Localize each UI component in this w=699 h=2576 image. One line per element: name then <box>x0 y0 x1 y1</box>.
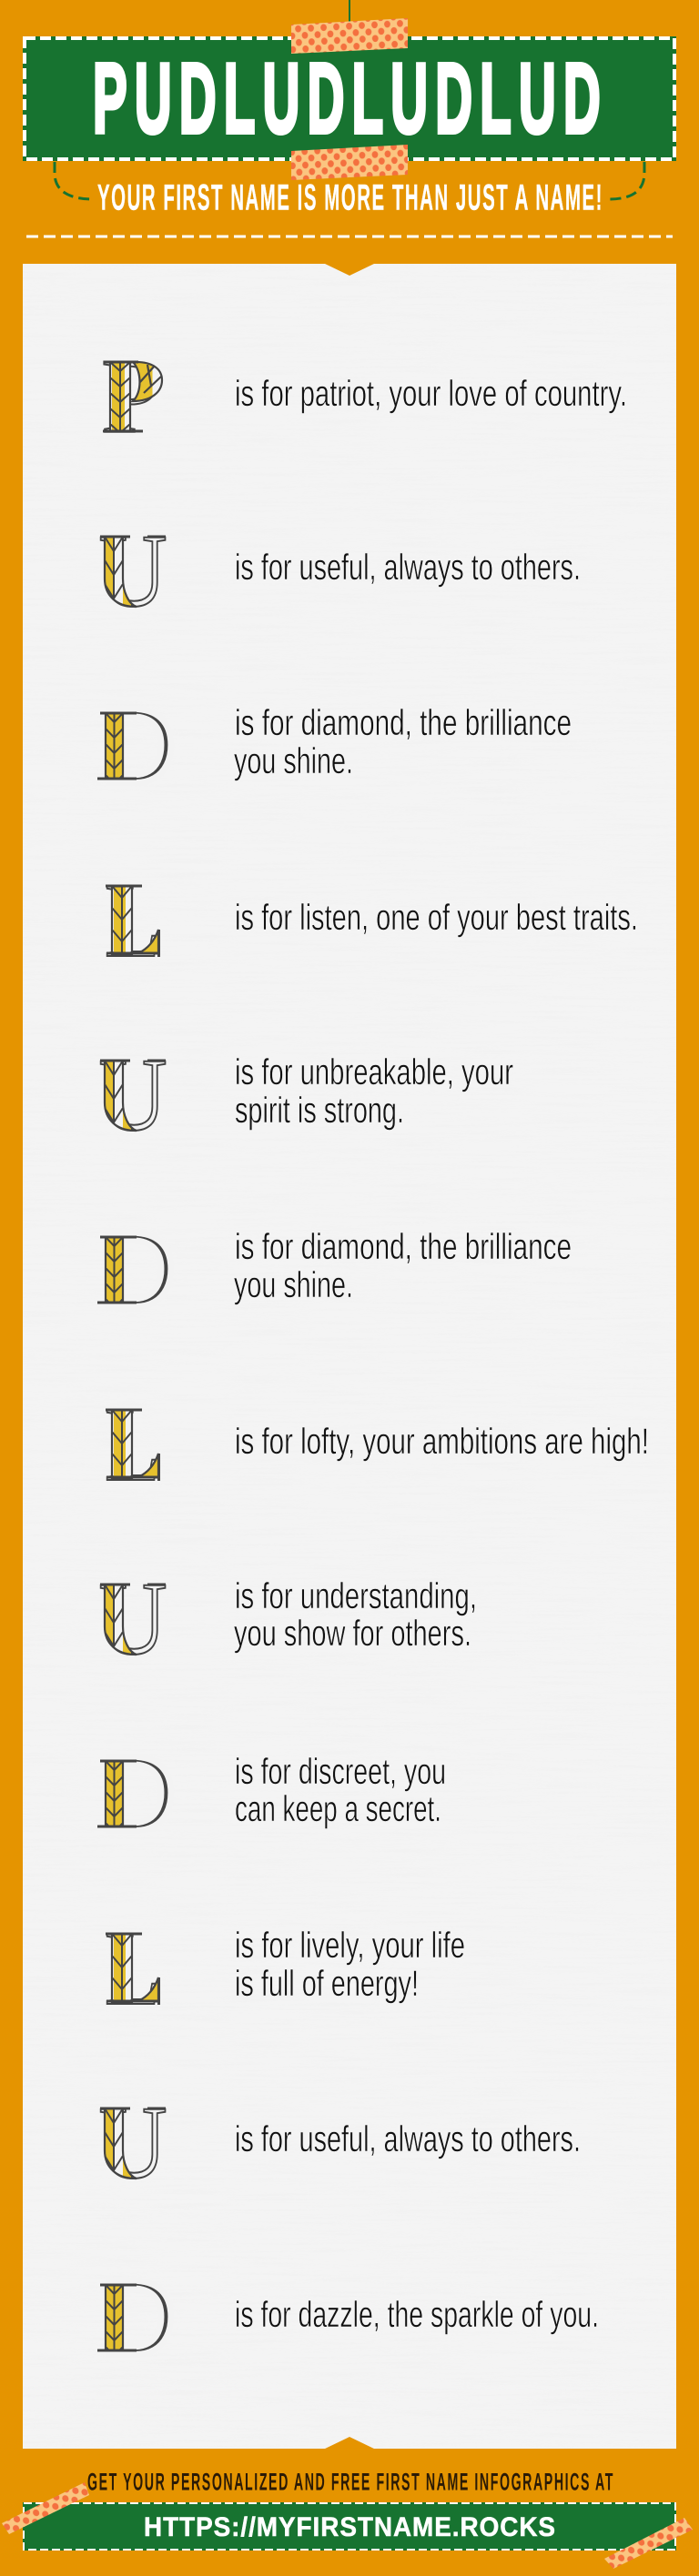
letter L: L <box>105 1908 160 2028</box>
description: you show for others. <box>234 1614 471 1654</box>
row 11: U <box>98 2084 581 2200</box>
letter D: D <box>101 1210 176 1330</box>
description <box>235 1052 513 1131</box>
description <box>234 703 572 781</box>
footer url banner <box>23 2502 676 2551</box>
row 5: U <box>98 1036 513 1152</box>
letter D: D <box>101 686 176 806</box>
description: you shine. <box>234 1265 353 1305</box>
description: is for unbreakable, your <box>235 1052 513 1092</box>
description <box>234 1227 572 1305</box>
letter L: L <box>105 1384 160 1504</box>
description <box>235 1926 465 2004</box>
letter U: U <box>98 512 167 629</box>
letter D: D <box>101 1734 176 1854</box>
description: you shine. <box>234 741 353 781</box>
letter U: U <box>98 1560 167 1676</box>
letter U: U <box>98 1036 167 1152</box>
tape top <box>291 18 408 54</box>
dashed separator <box>26 235 673 238</box>
description: is for discreet, you <box>235 1752 446 1792</box>
description: is full of energy! <box>235 1964 419 2004</box>
description <box>234 1576 477 1654</box>
url: HTTPS://MYFIRSTNAME.ROCKS <box>144 2512 556 2542</box>
header banner <box>23 0 676 161</box>
dashed connector right <box>609 162 644 199</box>
row 8: U <box>98 1560 477 1676</box>
description: is for diamond, the brilliance <box>235 703 572 743</box>
description: is for understanding, <box>235 1576 477 1616</box>
tape bottom <box>291 145 408 180</box>
row 2: U <box>98 512 581 629</box>
dashed connector left <box>55 162 94 199</box>
letter L: L <box>105 860 160 980</box>
row 6: D <box>97 1210 572 1330</box>
row 4: L <box>105 860 638 980</box>
white content panel <box>23 263 676 2450</box>
letter U: U <box>98 2084 167 2200</box>
letter D: D <box>101 2258 176 2378</box>
tape footer right <box>604 2518 693 2569</box>
description: is for lively, your life <box>235 1926 465 1966</box>
row 7: L <box>105 1384 649 1504</box>
row 3: D <box>97 686 572 806</box>
tape footer left <box>2 2482 89 2534</box>
row 12: D <box>97 2258 599 2378</box>
row 1: P <box>101 337 627 456</box>
row 9: D <box>97 1734 446 1854</box>
description: is for diamond, the brilliance <box>235 1227 572 1267</box>
description: can keep a secret. <box>235 1789 441 1829</box>
description: spirit is strong. <box>235 1091 404 1131</box>
description <box>235 1752 446 1829</box>
letter P: P <box>101 337 161 456</box>
row 10: L <box>105 1908 465 2028</box>
